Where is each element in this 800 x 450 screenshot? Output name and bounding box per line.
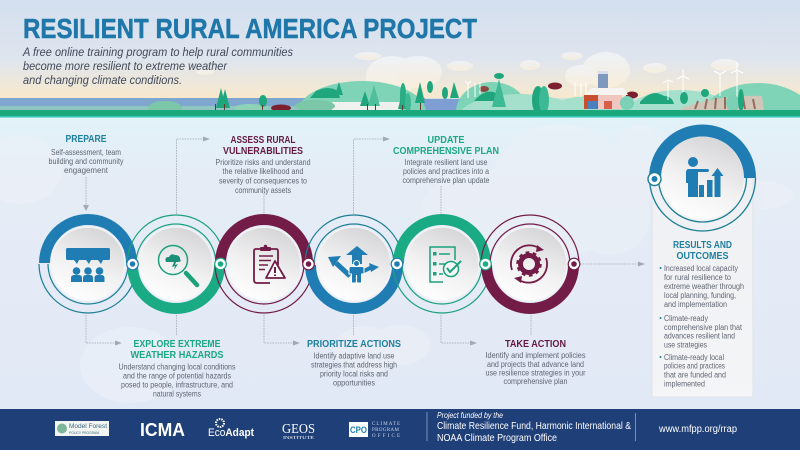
text: explore extreme weather hazards: EXPLORE EXTREME (134, 339, 221, 350)
text: prepare: PREPARE (66, 134, 107, 145)
text: assess rural vulnerabilities: Prioritize risks and understand (216, 158, 310, 167)
bullet list: for rural resilience to (664, 273, 731, 282)
barn (584, 88, 628, 95)
bullet list (660, 264, 744, 388)
bullet list: advances resilient land (664, 332, 735, 340)
text: assess rural vulnerabilities: VULNERABILITIES (223, 146, 303, 157)
logo: Model Forest Policy Program: Model Forest (69, 424, 107, 430)
step 5 circle: update (393, 220, 491, 313)
logo: Climate Program Office: CPO (350, 425, 367, 435)
bullet list: Increased local capacity (664, 264, 738, 273)
bullet list: use strategies (664, 340, 707, 350)
funding credit: NOAA Climate Program Office (437, 432, 557, 444)
text: update comprehensive plan (393, 135, 499, 185)
text: assess rural vulnerabilities: the relative likelihood and (222, 167, 304, 176)
water (0, 98, 425, 106)
bullet list: local planning, funding, (664, 291, 736, 300)
text: update comprehensive plan: policies and practices into a (403, 167, 489, 176)
subtitle: A free online training program to help rural communities (22, 45, 293, 59)
subtitle: and changing climate conditions. (23, 73, 182, 87)
text: update comprehensive plan: UPDATE (428, 135, 465, 146)
text: take action: and projects that advance land (487, 360, 584, 369)
text: explore extreme weather hazards: Understand changing local conditions (118, 362, 236, 372)
text: update comprehensive plan: comprehensive plan update (402, 176, 490, 185)
bullet list: Climate-ready local (664, 353, 724, 362)
background clouds (0, 124, 793, 403)
logo: GEOS Institute: INSTITUTE (283, 435, 315, 440)
icon: person with rising bar chart (686, 157, 724, 197)
text: take action: use resilience strategies in your (486, 368, 586, 378)
logo: Climate Program Office: PROGRAM (372, 428, 400, 433)
bullet list: comprehensive plan that (664, 323, 743, 332)
text: update comprehensive plan: Integrate resilient land use (404, 158, 488, 167)
text: prioritize actions: opportunities (333, 378, 375, 388)
text: take action: TAKE ACTION (505, 339, 566, 350)
red bushes (271, 104, 291, 110)
text: prepare (48, 134, 124, 175)
text: assess rural vulnerabilities: severity of consequences to (219, 176, 307, 186)
icon: checklist (430, 247, 461, 282)
trees (216, 73, 744, 114)
text: assess rural vulnerabilities: community assets (235, 186, 291, 195)
logo: Climate Program Office (349, 422, 400, 439)
logo: ICMA: ICMA (140, 420, 185, 440)
ground strip (0, 110, 800, 116)
text: explore extreme weather hazards: natural systems (153, 390, 201, 398)
panel: results and outcomes: RESULTS AND (673, 240, 732, 251)
text: assess rural vulnerabilities: ASSESS RURAL (230, 135, 296, 146)
text: assess rural vulnerabilities (216, 135, 310, 195)
subtitle (22, 45, 293, 87)
funding credit: Climate Resilience Fund, Harmonic International & (437, 420, 631, 432)
logo: Model Forest Policy Program (55, 421, 109, 436)
text: explore extreme weather hazards: WEATHER HAZARDS (130, 350, 224, 361)
icon: gear with cycle arrows (511, 245, 547, 283)
bullet list: and implementation (664, 300, 727, 309)
logo: Climate Program Office: OFFICE (372, 434, 400, 439)
bullet list: implemented (664, 380, 705, 388)
website: www.mfpp.org/rrap (658, 424, 737, 435)
logo: Climate Program Office: CLIMATE (372, 422, 400, 427)
panel: results and outcomes: OUTCOMES (676, 251, 729, 262)
text: explore extreme weather hazards: and the range of potential hazards (123, 372, 231, 380)
clouds (196, 52, 739, 90)
logo: EcoAdapt (208, 419, 254, 439)
page background (0, 117, 800, 409)
text: take action: Identify and implement policies (486, 351, 586, 360)
funding credit: Project funded by the (437, 411, 503, 420)
logo: EcoAdapt: EcoAdapt (208, 427, 254, 439)
silo (598, 74, 608, 88)
text: prioritize actions (307, 339, 401, 388)
footer bar (0, 409, 800, 450)
hills (298, 81, 426, 110)
icon: audience with speech bubble (66, 248, 110, 282)
step 6 circle: take action (481, 215, 579, 308)
icon: magnifier with storm cloud (158, 246, 197, 285)
bullet list: Climate-ready (664, 314, 708, 323)
funding credit (437, 411, 631, 444)
logo: Model Forest Policy Program: POLICY PROGRAM (69, 430, 99, 435)
logo: GEOS Institute: GEOS (282, 422, 315, 437)
text: take action: comprehensive plan (504, 377, 568, 386)
subtitle: become more resilient to extreme weather (23, 59, 228, 73)
step 1 circle: prepare (39, 220, 137, 313)
text: prioritize actions: priority local risks and (320, 370, 388, 378)
bullet list: policies and practices (664, 362, 725, 370)
title: RESILIENT RURAL AMERICA PROJECT (23, 13, 477, 44)
text: prioritize actions: Identify adaptive land use (314, 352, 395, 360)
text: prepare: Self-assessment, team (51, 148, 121, 157)
text: explore extreme weather hazards: posed to people, infrastructure, and (121, 380, 233, 390)
step 4 circle: prioritize (305, 215, 403, 308)
text: prepare: engagement (64, 166, 109, 175)
step 2 circle: explore (127, 215, 225, 308)
text: take action (486, 339, 586, 386)
text: prioritize actions: PRIORITIZE ACTIONS (307, 339, 401, 350)
link nodes (127, 258, 580, 270)
field (682, 96, 764, 110)
connector arrows (83, 136, 645, 346)
header landscape scene (0, 0, 800, 118)
text: explore extreme weather hazards (118, 339, 236, 398)
step 3 circle: assess (215, 220, 313, 313)
icon: person at branching arrows (328, 246, 379, 283)
bullet list: that are funded and (664, 370, 726, 380)
windmills (465, 62, 743, 100)
text: prepare: building and community (48, 157, 124, 166)
icon: clipboard with warning (254, 245, 285, 283)
panel: results and outcomes (648, 130, 756, 397)
bullet list: extreme weather through (664, 282, 744, 291)
text: prioritize actions: strategies that address high (311, 360, 397, 370)
text: update comprehensive plan: COMPREHENSIVE PLAN (393, 146, 499, 157)
